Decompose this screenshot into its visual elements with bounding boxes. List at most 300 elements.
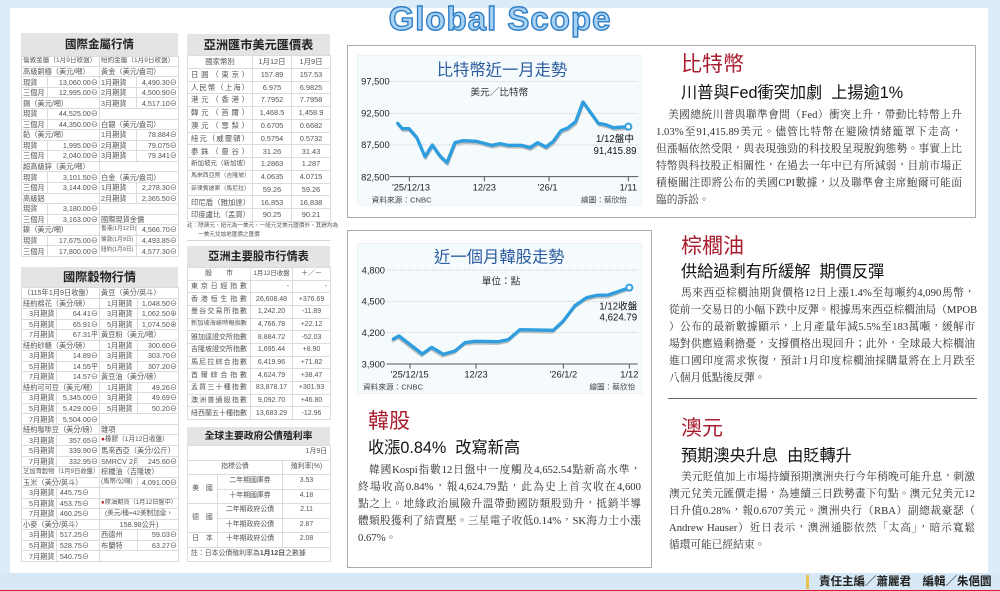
table: metals: 3,101.50⊖	[63, 173, 98, 182]
table: Asian FX: 59.26	[263, 185, 281, 194]
table: Asian stocks: 1月12日收盤	[253, 270, 290, 277]
table: grains: 黃豆油（美分/磅）	[101, 372, 161, 381]
table: grains: 332.95⊖	[69, 457, 98, 466]
text block: palm oil: 進口國印度需求恢復，預計1月印度棕櫚油採購量將在上月跌至	[669, 355, 975, 367]
table: Asian FX: 國家幣別	[205, 57, 235, 66]
table: Asian FX: 157.53	[300, 70, 322, 79]
bottom red rule	[0, 590, 1000, 591]
table: Asian FX: 90.21	[302, 210, 320, 219]
y axis labels: 82,500	[361, 172, 390, 182]
table: Asian FX: 0.5754	[261, 134, 283, 143]
table: grains: 雜項	[101, 425, 115, 434]
table: Asian stocks: -52.03	[302, 334, 321, 341]
table: metals: 現貨	[23, 109, 37, 118]
table: metals: 國際現貨金價	[101, 215, 144, 224]
text block: KOSPI: 0.67%。	[358, 532, 396, 544]
table: Asian stocks: 首爾綜合指數	[191, 372, 247, 379]
table: bond yields: 3.53	[300, 477, 313, 484]
source and credit	[363, 382, 636, 392]
x axis labels: '25/12/13	[392, 183, 430, 193]
text block: bitcoin	[656, 108, 962, 206]
table: grains: 5,429.00⊖	[63, 404, 98, 413]
table: metals: 1,995.00⊖	[63, 141, 98, 150]
table: grains: 5,345.00⊖	[63, 393, 98, 402]
table: metals: 17,800.00⊖	[59, 247, 98, 256]
table: grains: 3月期貨	[107, 393, 133, 402]
table: Asian stocks: 新加坡海峽時報指數	[191, 320, 247, 327]
text block: bitcoin: 1.03%至91,415.89美元。儘管比特幣在避險情緒籠罩下走高，	[656, 126, 962, 138]
table: grains: 西德州	[101, 530, 123, 539]
table: metals: 紐約金屬（1月9日收盤）	[101, 57, 174, 64]
table: Asian stocks: -	[325, 283, 327, 290]
table: grains: 3月期貨	[29, 351, 55, 360]
unit label: 單位：點	[482, 275, 521, 287]
table: Asian stocks: +301.93	[299, 384, 324, 391]
value callout: 4,624.79	[600, 313, 637, 324]
table: Asian FX: 菲律賓披索（馬尼拉）	[191, 186, 250, 192]
heading: palm oil: 棕櫚油	[681, 235, 744, 258]
table: metals: 3,163.00⊖	[63, 215, 98, 224]
table: bond yields	[187, 445, 331, 562]
table: metals: 3月期貨	[101, 151, 127, 160]
table: Asian stocks: 雅加達證交所指數	[191, 334, 247, 341]
table: metals: 現貨	[23, 236, 37, 245]
table: Asian stocks: 孟買三十種指數	[191, 384, 247, 391]
table: grains: 453.75⊖	[60, 499, 89, 508]
table: Asian stocks: 馬尼拉綜合指數	[191, 359, 247, 366]
table: Asian FX: 人民幣（上海）	[191, 83, 249, 92]
source and credit: 資料來源：CNBC	[363, 382, 423, 392]
table: grains: 3月期貨	[29, 436, 55, 445]
table: bond yields: 十年期國庫券	[229, 492, 271, 499]
table: Asian stocks: +71.82	[301, 359, 322, 366]
value callout: 91,415.89	[594, 146, 636, 157]
text block: palm oil: 馬來西亞棕櫚油期貨價格12日上漲1.4%至每噸約4,090馬幣，	[681, 287, 975, 299]
table: Asian FX: 16,838	[300, 198, 322, 207]
table: grains: 517.25⊖	[60, 530, 89, 539]
panel: grains table	[21, 267, 179, 562]
table: metals: 白金（美元/盎司）	[101, 173, 160, 182]
table: metals: 3,180.00⊖	[63, 204, 98, 213]
table: grains: 14.89⊖	[73, 351, 98, 360]
table: metals: 黃金（美元/盎司）	[101, 67, 160, 76]
table: grains: ●原油期貨（1月12日盤中）	[101, 499, 177, 506]
table: metals: 44,350.00⊖	[59, 120, 98, 129]
text block: Australian dollar	[669, 470, 975, 551]
table: grains: 紐約可可豆（美元/噸）	[23, 383, 97, 392]
value callout: 1/12收盤	[599, 300, 638, 312]
table: metals	[21, 56, 179, 257]
table: metals: 4,490.30⊖	[142, 78, 177, 87]
table: Asian stocks: 4,624.79	[258, 372, 285, 379]
x axis labels	[392, 183, 637, 193]
text block: bitcoin: 特幣與科技股正相關性，在過去一年中已有所減弱，目前市場正	[656, 160, 962, 172]
table: metals: 倫敦(1月9日)	[101, 237, 133, 243]
table: Asian stocks: 4,766.78	[258, 321, 285, 328]
table: Asian FX: 6.9825	[300, 83, 322, 92]
note: Asian FX: 註：除澳元、紐元為一美元、一紐元兌美元匯價外，其餘均為	[187, 223, 338, 229]
heading: Asian stocks	[187, 246, 330, 267]
heading: bond yields: 全球主要政府公債殖利率	[205, 431, 312, 442]
table: Asian FX: 泰銖（曼谷）	[191, 147, 249, 156]
y axis labels: 87,500	[361, 140, 390, 150]
table: Asian stocks: 吉隆坡證交所指數	[191, 346, 247, 353]
table: grains: 5月期貨	[107, 404, 133, 413]
table: metals: 白銀（美元/盎司）	[101, 120, 160, 129]
table: Asian stocks: 股 市	[205, 270, 233, 277]
table: metals: 三個月	[23, 183, 45, 192]
table: metals: 現貨	[23, 204, 37, 213]
source and credit: 繪圖：蔡欣怡	[581, 194, 627, 204]
table: Asian stocks: -	[287, 283, 289, 290]
text block: Australian dollar: 澳元兌美元匯價走揚，為連續三日跌勢畫下句點。澳元兌美元12	[669, 488, 975, 500]
table: Asian stocks: +38.47	[301, 372, 322, 379]
line series	[398, 102, 631, 165]
table: Asian stocks: 9,092.70	[258, 397, 285, 404]
table: metals: 78.884⊖	[148, 130, 177, 139]
heading: Asian FX	[187, 34, 330, 55]
heading: bond yields	[187, 427, 330, 445]
table: Asian FX: 港元（香港）	[191, 95, 249, 104]
table: grains: 5月期貨	[107, 362, 133, 371]
table: Asian FX: 0.6682	[300, 121, 322, 130]
table: metals: 鉛（美元/噸）	[23, 130, 68, 139]
table: grains: 303.70⊖	[148, 351, 177, 360]
table: grains: 1月期貨	[107, 341, 133, 350]
table: metals: 現貨	[23, 141, 37, 150]
table: bond yields: 德 國	[192, 514, 213, 521]
x axis labels: 1/11	[620, 183, 637, 193]
heading: metals: 國際金屬行情	[65, 39, 134, 51]
table: metals: 三個月	[23, 215, 45, 224]
table: metals: 13,060.00⊖	[59, 78, 98, 87]
table: bond yields: 註：日本公債殖利率為1月12日之數據	[191, 550, 306, 557]
y axis labels: 3,900	[362, 359, 385, 369]
table: Asian stocks: 紐西蘭五十種指數	[191, 410, 247, 417]
table: bond yields: 指標公債	[221, 463, 249, 470]
table: grains: 芝加哥穀物（1月9日收盤）	[23, 468, 99, 475]
table: metals: 44,525.00⊖	[59, 109, 98, 118]
table: Asian stocks: ＋／－	[301, 270, 322, 277]
table: Asian FX: 日圓（東京）	[191, 70, 249, 79]
table: grains: 460.25⊖	[60, 509, 89, 518]
table: grains: 5,504.00⊖	[63, 415, 98, 424]
y axis labels: 4,800	[362, 265, 385, 275]
text block: Australian dollar: Andrew Hauser）近日表示，澳洲通膨依然「太高」，暗示寬鬆	[669, 522, 975, 534]
table: Asian FX: 31.43	[302, 147, 320, 156]
text block: Australian dollar: 日升值0.28%，報0.6707美元。澳洲央行（RBA）副總裁豪瑟（	[669, 505, 975, 517]
table: grains: 5月期貨	[29, 404, 55, 413]
divider	[668, 398, 977, 399]
table: Asian FX: 90.25	[263, 210, 281, 219]
table: grains: 445.75⊖	[60, 488, 89, 497]
chart: bitcoin one month trend	[357, 55, 642, 206]
y axis labels: 97,500	[361, 77, 390, 87]
table: grains: 3月期貨	[29, 488, 55, 497]
source and credit	[372, 194, 627, 204]
footer accent	[806, 575, 809, 589]
table: Asian stocks	[187, 267, 331, 420]
table: grains: 158.98公升)	[120, 520, 158, 529]
table: grains: 5月期貨	[29, 320, 55, 329]
heading: Asian FX: 亞洲匯市美元匯價表	[204, 38, 313, 52]
table: metals: 超高級鋅（美元/噸）	[23, 162, 90, 171]
table: grains: 3月期貨	[107, 309, 133, 318]
table: metals: 4,517.10⊖	[142, 99, 177, 108]
table: metals: 1月期貨	[101, 183, 127, 192]
table: Asian FX: 59.26	[302, 185, 320, 194]
table: metals: 3月期貨	[101, 99, 127, 108]
table: grains: (美元/桶=42美制加侖，	[105, 510, 173, 517]
heading: bitcoin: 比特幣	[681, 53, 744, 76]
table: Asian FX: 1月9日	[299, 57, 322, 66]
table: grains: 1月期貨	[107, 299, 133, 308]
table: metals: 1月期貨	[101, 130, 127, 139]
table: Asian stocks: 澳洲普通股指數	[191, 397, 247, 404]
table: Asian FX: 31.26	[263, 147, 281, 156]
table: grains: 5月期貨	[107, 320, 133, 329]
text block: Australian dollar: 美元貶值加上市場持續預期澳洲央行今年稍晚可能升息，刺激	[681, 471, 975, 483]
table: grains: 1,062.50⊕	[142, 309, 177, 318]
table: grains: 5月期貨	[29, 541, 55, 550]
table: metals: 錫（美元/噸）	[23, 99, 68, 108]
heading: Australian dollar: 澳元	[681, 417, 723, 440]
table: grains: 3月期貨	[29, 393, 55, 402]
table: grains: (馬幣/公噸)	[101, 478, 133, 485]
table: Asian stocks: 83,878.17	[256, 384, 287, 391]
table: grains: 3月期貨	[29, 309, 55, 318]
table: metals: 1月期貨	[101, 78, 127, 87]
table: bond yields: 殖利率(%)	[291, 463, 322, 470]
table: bond yields: 二年期政府公債	[226, 506, 274, 513]
table: Asian FX: 4.0635	[261, 172, 283, 181]
table: metals: 2月期貨	[101, 141, 127, 150]
table: grains: 245.60⊖	[148, 457, 177, 466]
table: grains: 玉米（美分/英斗）	[23, 478, 82, 487]
table: grains: （115年1月9日收盤）	[23, 288, 93, 297]
table: grains: ●橡膠（1月12日收盤）	[101, 436, 169, 443]
table: grains: 64.41⊖	[73, 309, 98, 318]
subheading: palm oil: 供給過剩有所緩解 期價反彈	[681, 263, 884, 281]
footer band	[0, 573, 1000, 591]
table: grains: 528.75⊖	[60, 541, 89, 550]
table: metals: 4,500.90⊖	[142, 88, 177, 97]
table: metals: 三個月	[23, 151, 45, 160]
table: metals: 現貨	[23, 173, 37, 182]
table: Asian FX: 4.0715	[300, 172, 322, 181]
table: Asian stocks: -12.96	[302, 410, 321, 417]
table: grains: 7月期貨	[29, 330, 55, 339]
heading: Asian stocks: 亞洲主要股市行情表	[208, 251, 309, 263]
table: grains: 5月期貨	[29, 446, 55, 455]
x axis labels: 12/23	[464, 370, 488, 380]
table: grains: 黃豆（美分/英斗）	[101, 288, 161, 297]
panel: Asian FX table	[187, 34, 338, 241]
text block: palm oil: ）公布的最新數據顯示，上月產量年減5.5%至183萬噸，緩解市	[669, 321, 975, 333]
table: bond yields: 十年期政府公債	[226, 535, 274, 542]
table: grains: 小麥（美分/英斗）	[23, 520, 82, 529]
table: grains	[21, 287, 179, 562]
x axis labels: '26/1/2	[549, 370, 577, 380]
table: metals: 紐約(1月9日)	[101, 247, 133, 253]
table: Asian stocks: 13,683.29	[256, 410, 287, 417]
table: metals: 79.075⊖	[148, 141, 177, 150]
table: metals: 2月期貨	[101, 194, 127, 203]
table: Asian stocks: -11.89	[302, 308, 321, 315]
table: Asian FX: 7.7952	[261, 95, 283, 104]
table: metals: 2,040.00⊖	[63, 151, 98, 160]
table: metals: 倫敦金屬（1月9日收盤）	[23, 57, 96, 64]
text block: KOSPI: 點之上。地緣政治風險升溫帶動國防類股勁升，抵銷半導	[358, 498, 641, 510]
text block: bitcoin: 積極關注即將公布的美國CPI數據，以及聯準會主席鮑爾可能面	[656, 177, 962, 189]
x axis labels: '26/1	[538, 183, 558, 193]
table: bond yields: 2.87	[300, 521, 313, 528]
table: grains: 14.55平	[73, 362, 98, 371]
table: bond yields: 4.18	[300, 492, 313, 499]
chart title: 近一個月韓股走勢	[434, 248, 565, 266]
table: grains: 63.27⊖	[152, 541, 177, 550]
table: bond yields: 美 國	[192, 485, 213, 492]
table: metals: 三個月	[23, 88, 45, 97]
table: Asian stocks: +46.80	[301, 397, 322, 404]
text block: bitcoin: 美國總統川普與聯準會間（Fed）衝突上升，帶動比特幣上升	[668, 109, 962, 121]
table: grains: 540.75⊖	[60, 552, 89, 561]
y axis labels	[361, 77, 390, 182]
table: bond yields: 1月9日	[306, 448, 327, 455]
y axis labels	[362, 265, 385, 369]
x axis labels: 12/23	[473, 183, 496, 193]
table: metals: 4,577.30⊖	[142, 247, 177, 256]
table: Asian FX: 1,468.5	[260, 108, 284, 117]
note: Asian FX: 一美元兌該地匯價之匯價	[198, 232, 260, 238]
table: Asian FX: 157.89	[261, 70, 283, 79]
text block: KOSPI: 終場收高0.84%，報4,624.79點，此為史上首次收在4,600	[358, 481, 641, 493]
table: Asian stocks: 8,884.72	[258, 334, 285, 341]
table: Asian FX: 7.7958	[300, 95, 322, 104]
table: Asian stocks: 曼谷交易所指數	[191, 308, 247, 315]
table: grains: 黃豆粉（美元/噸）	[101, 330, 161, 339]
table: grains: 7月期貨	[29, 509, 55, 518]
table: grains: 357.65⊖	[69, 436, 98, 445]
source and credit: 繪圖：蔡欣怡	[589, 382, 636, 392]
table: metals: 2,365.50⊖	[142, 194, 177, 203]
table: Asian stocks: +8.90	[303, 346, 320, 353]
panel: bond yields table	[187, 427, 331, 562]
panel: Asian stocks table	[187, 246, 331, 420]
table: bond yields: 日 本	[192, 535, 213, 542]
chart title: 比特幣近一月走勢	[437, 61, 567, 79]
table: grains: 339.90⊖	[69, 446, 98, 455]
table: grains: 紐約棉花（美分/磅）	[23, 299, 90, 308]
source and credit: 資料來源：CNBC	[372, 194, 432, 204]
text block: palm oil: 從前一交易日的小幅下跌中反彈。根據馬來西亞棕櫚油局（MPOB	[669, 304, 977, 316]
table: Asian FX: 韓元（首爾）	[191, 108, 249, 117]
unit label: 美元／比特幣	[470, 86, 529, 98]
text block: bitcoin: 但漲幅依然受限，與表現強勁的科技股呈現脫鉤態勢。事實上比	[656, 143, 962, 155]
heading: KOSPI: 韓股	[368, 410, 410, 433]
table: grains: 7月期貨	[29, 552, 55, 561]
table: metals: 3,144.00⊖	[63, 183, 98, 192]
y axis labels: 4,200	[362, 328, 385, 338]
x axis	[387, 364, 638, 369]
table: metals: 2,278.30⊖	[142, 183, 177, 192]
subheading: KOSPI: 收漲0.84% 改寫新高	[368, 439, 520, 457]
table: Asian FX: 新加坡元（新加坡）	[191, 160, 250, 167]
table: metals: 79.341⊖	[148, 151, 177, 160]
table: grains: 50.20⊖	[152, 404, 177, 413]
y axis labels: 4,500	[362, 297, 385, 307]
table: Asian FX: 印度盧比（孟買）	[191, 210, 250, 219]
table: Asian FX: 16,853	[261, 198, 283, 207]
subheading: bitcoin: 川普與Fed衝突加劇 上揚逾1%	[681, 84, 903, 102]
subheading: Australian dollar: 預期澳央升息 由貶轉升	[681, 447, 852, 465]
table: grains: 3月期貨	[107, 351, 133, 360]
table: Asian stocks: 1,242.20	[258, 308, 285, 315]
table: Asian FX: 1.2863	[261, 159, 283, 168]
heading: grains: 國際穀物行情	[63, 270, 136, 284]
table: metals: 香港(1月12日)	[101, 226, 136, 232]
table: Asian stocks: +22.12	[301, 321, 322, 328]
table: grains: 300.60⊖	[148, 341, 177, 350]
table: Asian FX: 1,458.9	[299, 108, 323, 117]
table: Asian FX: 0.5732	[300, 134, 322, 143]
text block: palm oil	[669, 286, 977, 384]
table: grains: 7月期貨	[29, 372, 55, 381]
table: Asian stocks: +376.69	[299, 296, 324, 303]
table: Asian FX: 紐元（威靈頓）	[191, 134, 249, 143]
x axis labels: '25/12/15	[391, 370, 429, 380]
text block: Australian dollar: 循環可能已經結束。	[669, 539, 765, 551]
table: Asian FX: 6.975	[263, 83, 281, 92]
table: Asian FX: 馬來西亞幣（吉隆坡）	[191, 173, 250, 179]
table: metals: 12,995.00⊖	[59, 88, 98, 97]
x axis	[390, 177, 638, 181]
table: grains: 67.31平	[73, 330, 98, 339]
table: bond yields: 二年期國庫券	[229, 477, 271, 484]
text block: bitcoin: 臨的訴訟。	[656, 194, 709, 206]
value callout	[599, 300, 638, 324]
table: metals: 2月期貨	[101, 88, 127, 97]
chart: KOSPI one month trend	[357, 243, 642, 394]
table: grains: 馬來西亞（美分/公斤）	[101, 446, 175, 455]
table: grains: 1,074.50⊕	[142, 320, 177, 329]
panel: Korea feature border	[347, 230, 652, 568]
table: metals: 17,675.00⊖	[59, 236, 98, 245]
table: grains: 布蘭特	[101, 541, 123, 550]
table: grains: 紐約咖啡豆（美分/磅）	[23, 425, 97, 434]
table: Asian FX: 澳元（雪梨）	[191, 121, 249, 130]
table: grains: 5月期貨	[29, 362, 55, 371]
table: metals: 三個月	[23, 120, 45, 129]
table: grains: 棕櫚油（吉隆坡）	[101, 467, 159, 476]
text block: palm oil: 場對供應過剩擔憂，支撐價格出現回升；此外，全球最大棕櫚油	[669, 338, 975, 350]
table: bond yields: 2.08	[300, 535, 313, 542]
table: grains: 紐約砂糖（美分/磅）	[23, 341, 90, 350]
table: Asian FX: 0.6705	[261, 121, 283, 130]
table: Asian stocks: 6,419.96	[258, 359, 285, 366]
text block: KOSPI: 體類股獲利了結賣壓。三星電子收低0.14%，SK海力士小漲	[358, 515, 641, 527]
table: Asian stocks: 香港恒生指數	[191, 296, 247, 303]
table: grains: 14.57⊖	[73, 372, 98, 381]
text block: KOSPI	[358, 464, 641, 544]
table: bond yields: 十年期政府公債	[226, 521, 274, 528]
table: Asian FX: 1.287	[302, 159, 320, 168]
table: Asian FX: 印尼盾（雅加達）	[191, 198, 250, 207]
table: metals: 高級鋁	[23, 194, 45, 203]
table: grains: 1,048.50⊖	[142, 299, 177, 308]
table: grains: 307.20⊖	[148, 362, 177, 371]
editor credits: 責任主編／蕭麗君 編輯／朱俋圜	[819, 576, 992, 588]
